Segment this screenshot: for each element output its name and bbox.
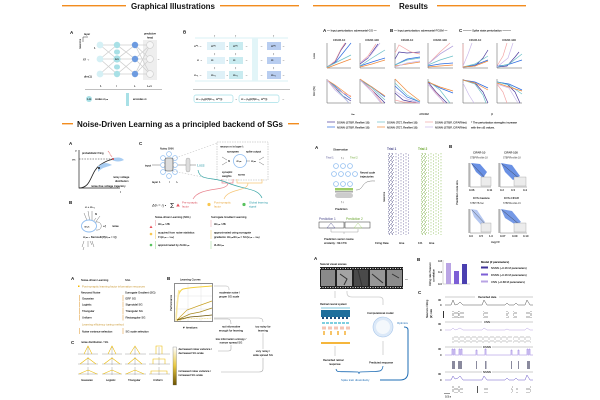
- formula boxes: σₗ ~ p₀ⱼ(σ|f(σₗ₋₁, σₗ⁺¹)): [196, 97, 222, 101]
- learning rule equation: factor: [182, 204, 189, 208]
- heading: Noise-Driven Learning: Noise-Driven Learning as a principled backend of SGs: [77, 120, 284, 129]
- panel: correspondence table A: [71, 276, 156, 334]
- panel: spike traces C: Neurons Firing: [425, 299, 429, 318]
- comparison table: F'ₗ(σₗ,ₘ − vₜₕ): [158, 235, 174, 239]
- panel: recurrent grid B: ↑: [273, 34, 275, 38]
- panel: network architecture A: layer: [84, 32, 90, 36]
- panel: recurrent grid B: ↕: [235, 66, 237, 70]
- panel: spike traces C: 30: [438, 347, 442, 351]
- panel: neuron model B: [69, 200, 119, 250]
- panel: network architecture A: head: [147, 36, 154, 40]
- panel: neuron model B: B: [69, 200, 73, 205]
- panel: scatter plots B: 0.11: [487, 188, 493, 192]
- comparison table: approximated using surrogate: [214, 230, 251, 234]
- panel: raster plots: Firing Rate: [375, 241, 389, 245]
- panel: recurrent grid B: ↕: [273, 52, 275, 56]
- panel: scatter plots B: 1.0: [489, 234, 493, 238]
- panel: recurrent grid B: σₗ: [233, 58, 236, 62]
- formula boxes: [194, 95, 285, 102]
- panel: recurrent grid B: →: [260, 44, 263, 48]
- panel: recurrent grid B: ↑: [235, 34, 237, 38]
- chart legend: NSNN (STBP, ResNet-18): [337, 126, 370, 130]
- panel: noise-driven learning rule C: [139, 141, 268, 249]
- panel: neuron model B: σₗ,ₘ ~ Bernoulli(P[σₗ,ₘ = 1]): [83, 235, 117, 239]
- panel: correspondence table A: Noise-driven Learning: [81, 278, 109, 282]
- panel: noise-driven learning rule C: L: [176, 180, 178, 184]
- neuron detail box: synaptic: [222, 170, 233, 174]
- panel: network architecture A: encodes σₗ: [133, 97, 147, 101]
- panel: learning curves B: increased SG scale: [178, 373, 203, 377]
- learning rule equation: Global learning: [249, 200, 268, 204]
- panel: spike traces C: 30: [438, 298, 442, 302]
- panel: raster plots: [375, 147, 443, 245]
- panel: noise distributions C: Gaussian: [81, 378, 93, 382]
- film strip: [320, 267, 403, 289]
- panel: results line charts: Acc (%): [312, 86, 316, 96]
- panel: recurrent grid B: ↕: [235, 52, 237, 56]
- panel: scatter plots B: 0.0: [469, 234, 473, 238]
- panel: learning curves B: narrow spread SG: [220, 340, 242, 344]
- panel: recurrent grid B: σₗ₋₁: [211, 73, 216, 77]
- chart legend: [327, 120, 517, 130]
- panel: spike traces C: [418, 290, 533, 398]
- connectors: [193, 179, 233, 199]
- panel: learning curves B: too noisy for: [255, 324, 271, 328]
- panel: learning curves B: decreased noise variance /: [178, 347, 212, 351]
- network connections: [100, 45, 150, 74]
- CNN trace: [445, 328, 533, 330]
- panel: recurrent grid B: xₗ₋₁ →: [194, 73, 202, 77]
- panel: network architecture A: L+1: [147, 84, 152, 88]
- panel: learning curves B: B: [167, 276, 171, 281]
- panel: results line charts: B: [390, 28, 394, 33]
- panel: recurrent grid B: xₗ⁺¹ →: [194, 44, 202, 48]
- panel: learning curves B: iterations: [186, 326, 198, 330]
- heading: Results: Results: [399, 2, 429, 11]
- panel: retina model A: Optimize: [397, 321, 408, 325]
- panel: scatter plots B: CIFAR-100: [504, 150, 518, 154]
- panel: learning curves B: proper SG scale: [219, 294, 240, 298]
- panel: robustness network A: Trial 1: [326, 156, 334, 160]
- panel: noise-driven learning rule C: input: [145, 164, 151, 168]
- panel: noise-driven learning rule C: l: [169, 180, 170, 184]
- learning rule equation: Δθₗ = η •: [151, 204, 167, 208]
- panel: results line charts: ——— Spike state perturbation ———: [463, 28, 511, 32]
- panel: firing curve A: noise-free voltage trajectory: [91, 184, 126, 188]
- panel: scatter plots B: STBP/ResNet-18: [470, 156, 488, 160]
- panel: firing curve A: probabilistic firing: [82, 151, 104, 155]
- panel: spike traces C: C: [418, 290, 422, 295]
- panel: correspondence table A: Surrogate Gradient (SG): [125, 290, 156, 294]
- prediction head background: [143, 40, 157, 80]
- panel: results line charts: CIFAR-10: [333, 38, 346, 42]
- panel: results line charts: [312, 28, 522, 130]
- panel: firing curve A: [69, 141, 130, 194]
- panel: spike traces C: Recorded data: [478, 295, 497, 299]
- panel: bar chart B: [417, 257, 527, 286]
- panel: retina model A: [314, 256, 408, 382]
- panel: recurrent grid B: →: [282, 44, 285, 48]
- panel: correspondence table A: Gaussian: [82, 296, 94, 300]
- panel: network architecture A: xₗˡ →: [82, 58, 90, 62]
- learning rule equation: factor: [214, 204, 221, 208]
- panel: spike traces C: DSNN: [483, 345, 491, 349]
- panel: results line charts: A: [323, 28, 327, 33]
- panel: correspondence table A: SG scale selection: [126, 330, 149, 334]
- neuron detail box: neuron m in layer l:: [220, 144, 244, 148]
- panel: correspondence table A: Logistic: [82, 302, 92, 306]
- chart legend: NSNN (TET, ResNet-18): [387, 126, 418, 130]
- panel: bar chart B: Model (# parameters): [481, 260, 509, 264]
- panel: neuron model B: noise: [112, 224, 119, 228]
- panel: robustness network A: Trial 2: [350, 156, 358, 160]
- panel: recurrent grid B: σₗ: [271, 58, 274, 62]
- panel: learning curves B: not informative: [222, 324, 241, 328]
- panel: learning curves B: Performance: [169, 295, 173, 311]
- panel: spike traces C: CNN: [484, 320, 490, 324]
- heading: Graphical Illustrations: Graphical Illustrations: [131, 2, 216, 11]
- panel: learning curves B: #: [183, 326, 185, 330]
- panel: results line charts: CIFAR-100: [365, 38, 379, 42]
- panel: noise distributions C: C: [71, 340, 75, 345]
- panel: raster plots: neurons: [382, 191, 386, 202]
- panel: results line charts: εFGSM: [419, 112, 429, 116]
- panel: correspondence table A: A: [71, 276, 75, 281]
- panel: retina model A: Natural visual scenes: [320, 262, 347, 266]
- panel: firing curve A: t: [120, 190, 121, 194]
- panel: recurrent grid B: →: [226, 58, 228, 62]
- chart row 2 lines: [327, 79, 522, 103]
- panel: correspondence table A: ERF SG: [126, 296, 136, 300]
- panel: network architecture A: [70, 30, 162, 106]
- panel: spike traces C: 0: [440, 378, 442, 382]
- comparison table: Surrogate Gradient Learning: [211, 215, 247, 219]
- neuron detail box: soma: [238, 172, 245, 176]
- neuron detail box: σₗ,ₘ: [251, 159, 256, 163]
- panel: network architecture A: L: [134, 84, 136, 88]
- panel: robustness network A: Prediction 1: [319, 217, 336, 221]
- neuron detail box: [217, 142, 268, 180]
- panel: scatter plots B: 0.06: [469, 188, 475, 192]
- panel: firing curve A: A: [69, 141, 73, 146]
- panel: scatter plots B: [449, 144, 529, 244]
- panel: retina model A: Recorded retinal: [323, 358, 344, 362]
- panel: scatter plots B: B: [449, 144, 453, 149]
- panel: results line charts: CIFAR-100: [502, 38, 516, 42]
- panel: learning curves B: Learning Curves: [180, 278, 201, 282]
- panel: bar chart B: DSNN (~0.16 M parameters): [491, 273, 527, 277]
- panel: firing curve A: distribution: [115, 179, 129, 183]
- panel: raster plots: Trial 2: [418, 147, 427, 151]
- neuron detail box: σₗ,ₘ: [236, 159, 241, 163]
- panel: recurrent grid B: σₗ⁺¹: [211, 44, 216, 48]
- comparison table: acquired from noise statistics:: [158, 230, 195, 234]
- panel: recurrent grid B: →: [245, 58, 248, 62]
- panel: bar chart B: 0.8: [438, 259, 442, 263]
- panel: network architecture A: codes σₗ,ₘ: [95, 97, 108, 101]
- annotations: [214, 286, 229, 290]
- panel: scatter plots B: 0.4: [523, 188, 527, 192]
- panel: neuron model B: θₗ: [95, 212, 98, 216]
- scale bar: [444, 392, 450, 394]
- panel: scatter plots B: 0.2: [500, 188, 504, 192]
- panel: scatter plots B: DVS-CIFAR: [504, 196, 519, 200]
- panel: correspondence table A: Uniform: [82, 316, 92, 320]
- panel: correspondence table A: Post-synaptic learning factor information resources: [82, 284, 146, 288]
- panel: learning curves B: decreased SG scale: [178, 351, 204, 355]
- colour scale: [173, 347, 176, 385]
- panel: learning curves B: [167, 276, 273, 385]
- panel: network architecture A: neurons: [78, 38, 82, 49]
- noisy SNN nodes: [161, 152, 177, 178]
- panel: scatter plots B: Avg FF: [491, 240, 500, 244]
- retina layers: [321, 307, 350, 344]
- legend: [86, 96, 92, 102]
- chart legend: with the x/β values.: [471, 126, 495, 130]
- panel: retina model A: —: [405, 277, 408, 281]
- panel: scatter plots B: 0.10: [523, 234, 529, 238]
- section rules: [445, 297, 533, 372]
- chart legend: DSNN (TET, ResNet-18): [387, 120, 418, 124]
- panel: results line charts: C: [459, 28, 463, 33]
- panel: recurrent grid B: xₗ →: [197, 58, 203, 62]
- panel: retina model A: Spike train dissimilarity: [341, 378, 370, 382]
- panel: scatter plots B: Prediction code sim.: [455, 180, 459, 205]
- learning rule equation: signal: [249, 204, 257, 208]
- panel: firing curve A: u: [75, 148, 77, 152]
- panel: scatter plots B: STBP/7B-Net: [470, 202, 484, 205]
- panel: correspondence table A: Neuronal Noise: [81, 290, 101, 294]
- panel: robustness network A: Observation: [333, 148, 349, 152]
- panel: spike traces C: 0: [440, 353, 442, 357]
- panel: robustness network A: similarity : 99.17%: [324, 241, 347, 245]
- panel: network architecture A: 1: [100, 84, 102, 88]
- panel: noise-driven learning rule C: Loss: [197, 164, 205, 168]
- panel: network architecture A: l: [116, 84, 117, 88]
- neuron detail box: θₗ: [228, 159, 231, 163]
- panel: bar chart B: 0.4: [438, 270, 442, 274]
- panel: scatter plots B: 0.3: [511, 188, 515, 192]
- panel: spike traces C: 0: [440, 328, 442, 332]
- panel: network architecture A: →: [157, 57, 160, 61]
- panel: results line charts: εₐₒ: [351, 112, 355, 116]
- comparison table: approximated by ∂L/∂σₗ,ₘ: [158, 243, 190, 247]
- axes and grids: [327, 43, 522, 103]
- panel: robustness network A: ↑↓: [341, 156, 344, 160]
- formula boxes: ...: [282, 97, 285, 101]
- panel: recurrent grid B: →: [226, 44, 228, 48]
- panel: scatter plots B: DVS-Gesture: [473, 196, 490, 200]
- panel: spike traces C: NSNN: [483, 370, 491, 374]
- comparison table: gradients: ∂σₗ,ₘ/∂vₗ,ₘ ≈ SG(vₗ,ₘ − vₜₕ): [214, 235, 260, 239]
- panel: bar chart B: 0.0: [438, 282, 442, 286]
- comparison table: [150, 215, 260, 249]
- panel: spike traces C: 30: [438, 372, 442, 376]
- comparison table: ∂σₗ,ₘ / ∂θₗ: [158, 222, 170, 226]
- panel: robustness network A: A: [315, 145, 319, 150]
- panel: bar chart B: NSNN (~0.16 M parameters): [491, 266, 527, 270]
- panel: scatter plots B: STBP/ResNet-18: [503, 156, 521, 160]
- panel: network architecture A: dim(1): [84, 74, 92, 78]
- panel: firing curve A: vₜₕ: [72, 158, 76, 162]
- panel: neuron model B: +ξ: [103, 224, 107, 228]
- panel: recurrent grid B: →: [282, 73, 285, 77]
- panel: raster plots: Trial 1: [387, 147, 396, 151]
- DSNN trace: [445, 349, 533, 355]
- panel: recurrent grid B: ↑: [214, 34, 216, 38]
- neuron detail box: weights: [222, 174, 232, 178]
- panel: noise distributions C: noise distribution / SG: [81, 340, 108, 344]
- panel: scatter plots B: 0.09: [512, 234, 518, 238]
- panel: robustness network A: ↑↓: [341, 200, 344, 204]
- panel: robustness network A: Prediction: [335, 207, 348, 211]
- panel: retina model A: Computational model: [367, 311, 394, 315]
- panel: spike traces C: (#) rate: [429, 309, 433, 318]
- panel: scatter plots B: 0.5: [479, 234, 483, 238]
- panel: network architecture A: Lm: [87, 97, 92, 101]
- learning rule equation: Post-synaptic: [214, 200, 231, 204]
- panel: correspondence table A: SGL: [125, 278, 131, 282]
- panel: retina model A: response: [329, 362, 341, 366]
- panel: bar chart B: CNN (~0.68 M parameters): [491, 280, 525, 284]
- panel: recurrent grid B: ↕: [214, 66, 216, 70]
- panel: spike traces C: 0.5 s: [445, 394, 452, 398]
- comparison table: ∂L/∂σₗ,ₘ: [214, 243, 224, 247]
- panel: recurrent grid B: B: [183, 30, 187, 34]
- panel: raster plots: time: [399, 241, 405, 245]
- panel: robustness network A: Prediction vector cosine: [324, 237, 354, 241]
- panel: noise distributions C: Logistic: [106, 378, 116, 382]
- comparison table: ∂σₗ,ₘ / ∂θₗ: [214, 222, 226, 226]
- panel: correspondence table A: Noise variance selection: [82, 330, 113, 334]
- panel: spike traces C: 0: [440, 303, 442, 307]
- panel: results line charts: CIFAR-100: [433, 38, 447, 42]
- panel: correspondence table A: Learning efficiency tuning method: [82, 322, 124, 326]
- flow arrows: [335, 291, 383, 305]
- panel: recurrent grid B: →: [260, 58, 263, 62]
- chart legend: * The perturbation strengths increase: [471, 120, 517, 124]
- panel: recurrent grid B: →: [260, 73, 263, 77]
- panel: scatter plots B: 0.07: [500, 234, 506, 238]
- panel: recurrent grid B: →: [245, 44, 248, 48]
- panel: recurrent grid B: σₗ⁺¹: [271, 44, 276, 48]
- panel: retina model A: Predicted response: [369, 360, 394, 364]
- panel: recurrent grid B: σₗ: [211, 58, 214, 62]
- panel: neuron model B: xₗ + σₗ₋₁: [84, 205, 95, 209]
- panel: bar chart B: Firing rate Pearson: [428, 262, 432, 286]
- formula boxes: →: [234, 97, 238, 101]
- panel: recurrent grid B: σₗ₋₁: [271, 73, 276, 77]
- panel: scatter plots B: STBP/ResNet-19: [503, 202, 521, 205]
- panel: retina model A: A: [314, 256, 318, 261]
- panel: learning curves B: moderate noise /: [219, 290, 240, 294]
- panel: network architecture A: A: [70, 30, 74, 35]
- chart legend: DSNN (STBP, ResNet-18): [337, 120, 370, 124]
- chart row 1 lines: [327, 43, 522, 68]
- panel: correspondence table A: Triangular: [82, 309, 95, 313]
- panel: noise distributions C: [71, 340, 170, 382]
- panel: noise distributions C: Uniform: [153, 378, 163, 382]
- panel: network architecture A: predictive: [144, 32, 156, 36]
- chart legend: NSNN (STBP, CIFARNet): [435, 126, 467, 130]
- NSNN trace: [445, 375, 533, 380]
- panel: robustness network A: [315, 145, 376, 245]
- panel: spike traces C: 30: [438, 322, 442, 326]
- formula boxes: σₗ ~ p₀ⱼ(σ|f(σₗ₋₁, σₗ⁺¹)): [241, 97, 267, 101]
- comparison table: Noise-driven Learning (NDL): [155, 215, 191, 219]
- panel: recurrent grid B: σₗ⁺¹: [233, 44, 238, 48]
- panel: bar chart B: correlation: [432, 268, 436, 282]
- panel: noise distributions C: Triangular: [128, 378, 141, 382]
- panel: robustness network A: Prediction 2: [346, 217, 363, 221]
- panel: correspondence table A: Sigmoidal SG: [126, 302, 143, 306]
- panel: noise-driven learning rule C: layer 1: [152, 180, 161, 184]
- divider: [85, 88, 162, 90]
- neuron detail box: spike output: [246, 150, 261, 154]
- panel: recurrent grid B: [183, 30, 290, 102]
- panel: correspondence table A: Triangular SG: [126, 309, 143, 313]
- panel: retina model A: Retinal neural system: [320, 302, 348, 306]
- panel: learning curves B: enough for learning: [219, 328, 243, 332]
- panel: recurrent grid B: →: [226, 73, 228, 77]
- network nodes: [97, 42, 153, 77]
- panel: robustness network A: trajectories: [360, 174, 374, 178]
- learning rule equation: Pre-synaptic: [182, 200, 198, 204]
- chart legend: DSNN (STBP, CIFARNet): [435, 120, 467, 124]
- learning rule equation: Σ: [170, 203, 175, 210]
- panel: recurrent grid B: ↕: [214, 52, 216, 56]
- panel: results line charts: β: [491, 112, 493, 116]
- panel: results line charts: CIFAR-10: [401, 38, 414, 42]
- panel: noise-driven learning rule C: Noisy SNN: [160, 146, 174, 150]
- recorded trace: [445, 300, 533, 305]
- panel: correspondence table A: Rectangular SG: [126, 316, 145, 320]
- panel: scatter plots B: CIFAR-10: [473, 150, 486, 154]
- neuron detail box: synapses: [227, 150, 239, 154]
- panel: recurrent grid B: ↕: [273, 66, 275, 70]
- panel: neuron model B: σₗ,ₘ: [84, 224, 89, 228]
- panel: learning curves B: wide spread SG: [253, 353, 273, 357]
- panel: network architecture A: Lm: [115, 57, 120, 61]
- panel: recurrent grid B: σₗ₋₁: [233, 73, 238, 77]
- panel: bar chart B: B: [417, 257, 421, 262]
- panel: raster plots: time: [429, 241, 435, 245]
- panel: learning curves B: increased noise variance /: [178, 369, 211, 373]
- panel: results line charts: CIFAR-10: [469, 38, 482, 42]
- panel: network architecture A: 1: [94, 46, 96, 50]
- panel: recurrent grid B: →: [282, 58, 285, 62]
- panel: learning curves B: learning: [258, 328, 268, 332]
- panel: results line charts: — Input perturbation: adversarial-FGSM —: [394, 28, 448, 32]
- panel: raster plots: F.R.: [418, 241, 423, 245]
- panel: learning curves B: very noisy /: [256, 349, 270, 353]
- panel: results line charts: Loss: [312, 52, 316, 59]
- panel: robustness network A: Neural code: [360, 170, 376, 174]
- panel: results line charts: — Input perturbation: adversarial-GG —: [327, 28, 377, 32]
- panel: learning curves B: low information entropy /: [216, 337, 246, 341]
- learning rule equation: [151, 200, 268, 210]
- panel: firing curve A: noisy voltage: [113, 175, 130, 179]
- panel: noise-driven learning rule C: C: [139, 141, 143, 146]
- panel: recurrent grid B: →: [245, 73, 248, 77]
